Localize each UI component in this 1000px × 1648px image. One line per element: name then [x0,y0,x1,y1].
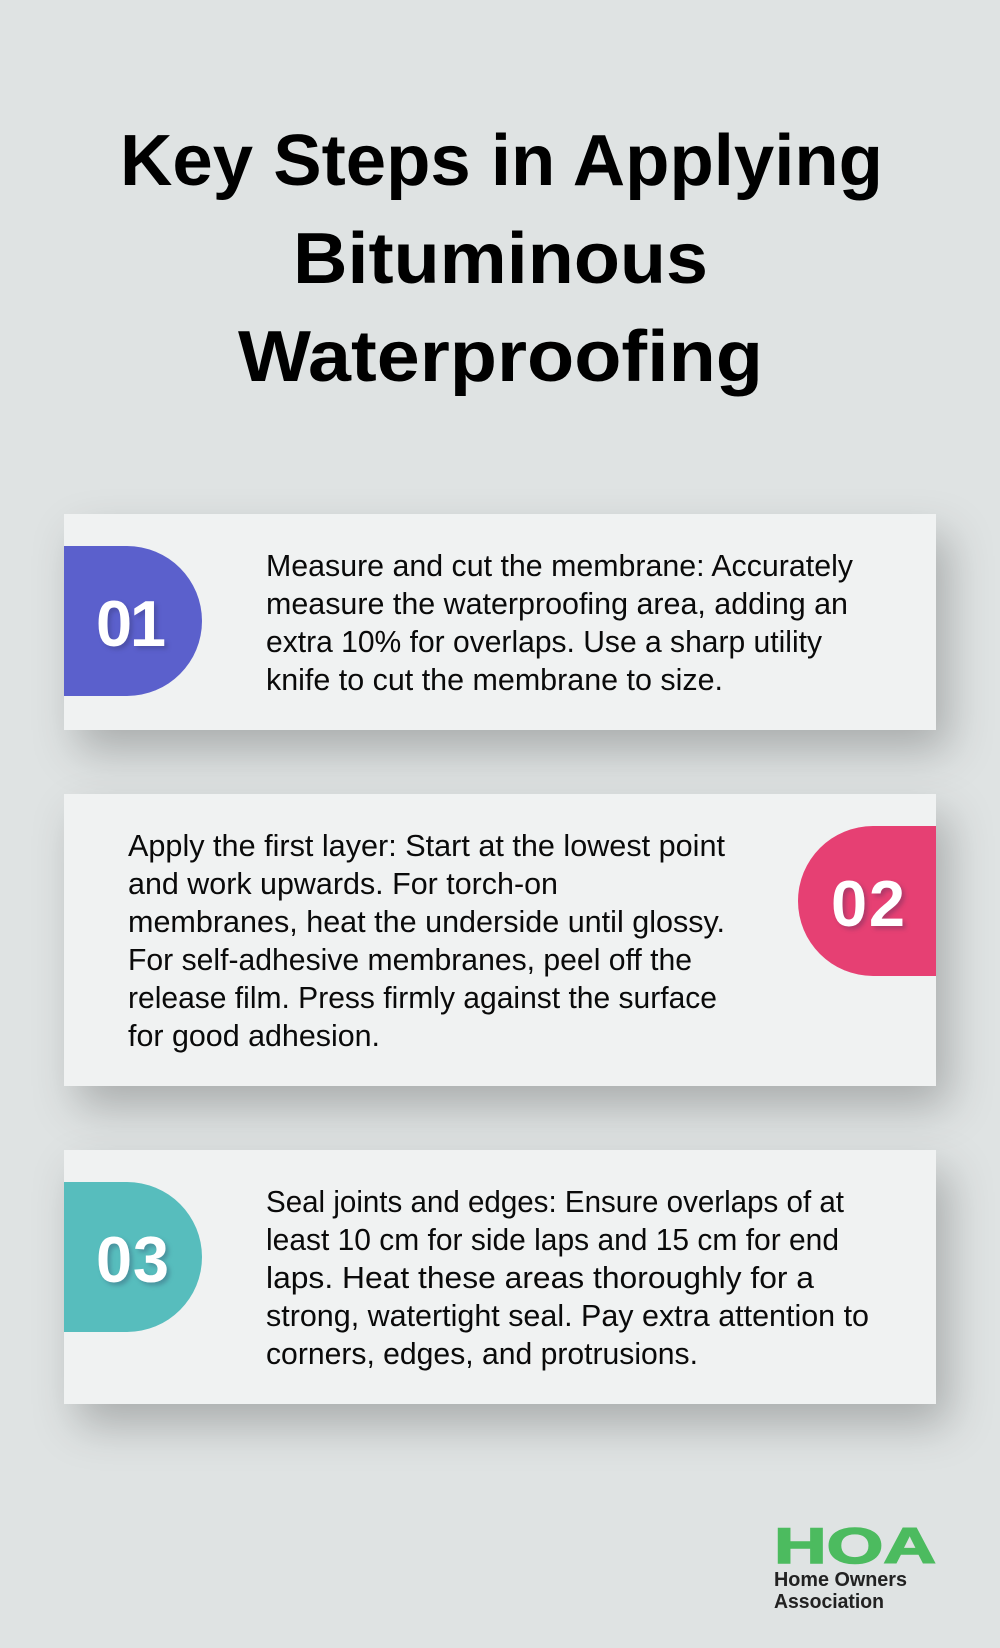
step 1 text: extra 10% for overlaps. Use a sharp utility [266,625,823,659]
step 1 text: Measure and cut the membrane: Accurately [266,549,854,583]
card background 1 [64,514,936,730]
number badge 2 [798,826,936,976]
logo: Home Owners Association [774,1518,936,1613]
step number 03: 03 [96,1223,169,1296]
logo: Home Owners Association: HOA [774,1518,936,1574]
step 2 text: release film. Press firmly against the surface [128,981,717,1015]
logo: Home Owners Association: Association [774,1591,884,1613]
step 2 text: Apply the first layer: Start at the lowest point [128,829,726,863]
title [120,121,883,397]
step 2 text [128,829,726,1053]
step number 02: 02 [831,867,905,940]
title: Key Steps in Applying [120,121,883,201]
panel: step 1 [64,514,936,730]
title: Bituminous [293,219,708,299]
step 2 text: membranes, heat the underside until glossy. [128,905,725,939]
step 3 text [266,1185,869,1371]
step number 01: 01 [96,587,166,660]
title: Waterproofing [238,317,763,397]
step 1 text [266,549,854,697]
step 3 text: corners, edges, and protrusions. [266,1337,698,1371]
step 1 text: knife to cut the membrane to size. [266,663,723,697]
step 1 text: measure the waterproofing area, adding an [266,587,848,621]
number badge 1 [64,546,202,696]
logo: Home Owners Association: Home Owners [774,1569,907,1591]
card background 3 [64,1150,936,1404]
step 3 text: least 10 cm for side laps and 15 cm for end [266,1223,839,1257]
card background 2 [64,794,936,1086]
step 2 text: For self-adhesive membranes, peel off the [128,943,692,977]
step 2 text: for good adhesion. [128,1019,380,1053]
step 3 text: Seal joints and edges: Ensure overlaps of at [266,1185,845,1219]
step 2 text: and work upwards. For torch-on [128,867,558,901]
step 3 text: strong, watertight seal. Pay extra attention to [266,1299,869,1333]
number badge 3 [64,1182,202,1332]
step 3 text: laps. Heat these areas thoroughly for a [266,1261,814,1295]
panel: step 3 [64,1150,936,1404]
panel: step 2 [64,794,936,1086]
